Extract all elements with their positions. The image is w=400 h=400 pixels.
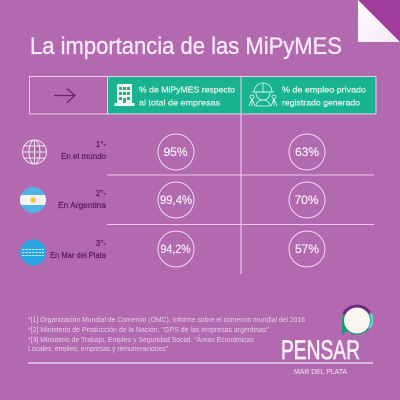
row label: En Argentina [58,201,107,210]
value: 63%: 63% [295,145,319,159]
footnotes: Locales: empleo, empresas y remuneraciones" [28,346,168,353]
value: 57%: 57% [295,242,319,256]
value: 99,4% [158,182,194,218]
title: La importancia de las MiPyMES [30,33,342,60]
footnotes: *[2] Ministerio de Producción de la Nación. "GPS de las empresas argentinas" [28,327,270,334]
icon: Argentine flag [20,187,46,213]
value: 95%: 95% [163,145,188,159]
value: 70% [289,182,325,218]
footnotes: *[3] Ministerio de Trabajo, Empleo y Seguridad Social. "Áreas Económicas [28,335,254,344]
table grid lines [107,114,374,274]
row 2: Argentina [20,182,325,218]
row label: 1°- [96,140,106,149]
icon: speech bubble [342,305,372,335]
row label: En el mundo [61,152,107,161]
logo: Pensar Mar del Plata [281,305,372,376]
column header: share of employment: % de empleo privado [282,84,366,94]
icon: arrow [54,88,75,102]
icon: building [114,84,134,106]
value: 63% [289,134,325,170]
value: 99,4%: 99,4% [160,195,192,207]
row label: 3°- [96,239,106,248]
page corner fold [358,0,400,42]
icon: globe [22,140,46,164]
row 3: Mar del Plata [20,231,325,267]
icon: workers [249,83,277,106]
column header: share of employment: registrado generado [282,98,360,108]
row label: 2°- [96,189,106,198]
row label: En Mar del Plata [50,251,107,260]
column header: share of companies: % de MiPyMES respecto [139,84,235,94]
value: 95% [158,134,194,170]
value: 57% [289,231,325,267]
value: 70%: 70% [294,193,319,207]
wordmark: PENSAR [281,335,360,365]
value: 94,2% [158,231,194,267]
location: MAR DEL PLATA [294,367,347,376]
column header: share of companies: al total de empresas [139,98,220,108]
icon: water [20,240,46,266]
table header [30,76,376,114]
row 1: world [22,134,325,170]
footer rule [28,362,373,364]
value: 94,2%: 94,2% [160,244,190,256]
footnotes: *[1] Organización Mundial de Comercio (OMC). Informe sobre el comercio mundial del 2016 [28,317,305,324]
